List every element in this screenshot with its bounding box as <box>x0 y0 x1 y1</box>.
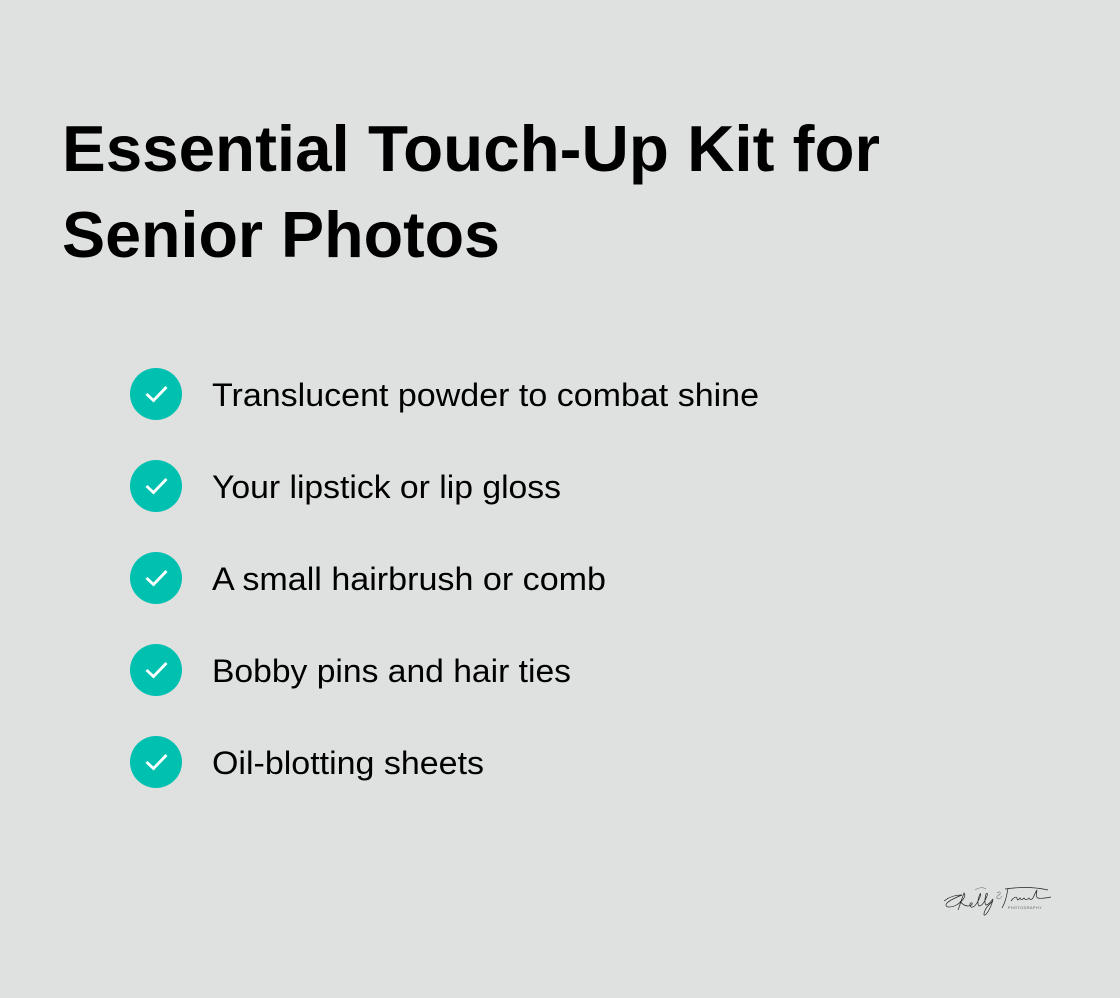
title: Essential Touch-Up Kit for <box>62 112 880 185</box>
list item: lipstick: Your lipstick or lip gloss <box>212 469 561 505</box>
list item: bobby pins <box>130 644 571 696</box>
logo: signature <box>944 888 1051 915</box>
logo: signature: PHOTOGRAPHY <box>1008 906 1042 910</box>
list item: translucent powder: Translucent powder to combat shine <box>212 377 759 413</box>
list item: translucent powder <box>130 368 759 420</box>
list item: blotting sheets: Oil-blotting sheets <box>212 745 484 781</box>
list item: hairbrush: A small hairbrush or comb <box>212 561 606 597</box>
list item: hairbrush <box>130 552 606 604</box>
checklist <box>130 368 759 788</box>
list item: lipstick <box>130 460 561 512</box>
list item: blotting sheets <box>130 736 484 788</box>
list item: bobby pins: Bobby pins and hair ties <box>212 653 571 689</box>
title <box>62 112 880 271</box>
title: Senior Photos <box>62 198 500 271</box>
